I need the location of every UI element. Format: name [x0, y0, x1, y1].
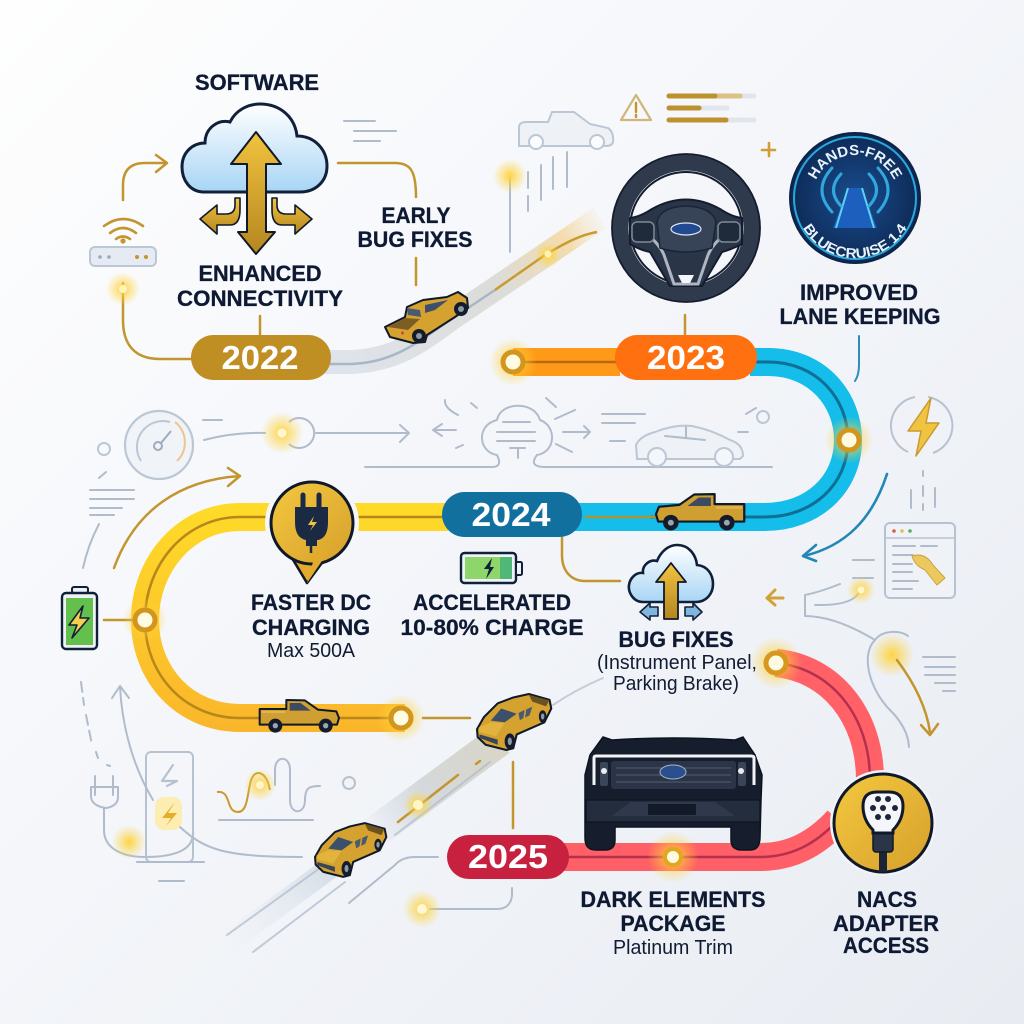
dashed connectors: [911, 471, 935, 510]
text: faster DC charging: FASTER DC: [251, 590, 371, 615]
glow marker with ring: [261, 412, 314, 454]
text: NACS adapter access: [833, 887, 939, 958]
track: 2023 orange: [513, 348, 620, 376]
icon: cloud outline: [365, 406, 772, 467]
text: faster DC charging: Max 500A: [267, 640, 356, 662]
track: 2025 red: [560, 663, 870, 857]
text: improved lane keeping: LANE KEEPING: [780, 304, 940, 329]
road: lower diagonal link: [225, 678, 603, 952]
badge: BlueCruise: [789, 132, 921, 264]
icon: speedometer: [125, 411, 193, 479]
track: 2024 yellow curve: [145, 517, 448, 718]
faint outline illustrations: middle band: [83, 398, 772, 568]
text: dark elements package: Platinum Trim: [613, 937, 733, 959]
icon: dark elements truck front: [585, 737, 762, 850]
pill: 2024: 2024: [472, 496, 551, 533]
truck: diagonal lower: [315, 823, 386, 877]
text: accelerated charge: 10-80% CHARGE: [400, 615, 584, 640]
icon: warning triangle: [621, 95, 651, 120]
arrow: gray upward: [112, 686, 153, 800]
text: accelerated charge: ACCELERATED: [413, 590, 571, 615]
track: 2023-2024 blue curve: [575, 362, 848, 517]
status bars: [669, 96, 754, 120]
text: dark elements package: PACKAGE: [620, 911, 726, 936]
pill: 2022: [191, 335, 331, 380]
truck: yellow track: [260, 700, 339, 733]
gold connectors: [104, 155, 859, 828]
text: enhanced connectivity: CONNECTIVITY: [177, 286, 343, 311]
text: early bug fixes: BUG FIXES: [358, 227, 472, 252]
text: NACS adapter access: ACCESS: [843, 933, 929, 958]
icon: browser window: [885, 523, 955, 598]
icon: NACS adapter: [830, 770, 936, 876]
badge text top: HANDS-FREE: [808, 144, 902, 180]
plus sign: [762, 143, 775, 156]
faint outline illustrations: lower left: [81, 682, 512, 928]
icon: bug fixes cloud: [629, 545, 713, 620]
dashed arc: [81, 682, 110, 766]
text: dark elements package: [580, 887, 766, 959]
icon: pickup wheels: [529, 135, 604, 149]
text: accelerated charge: [400, 590, 584, 640]
road junction lines: [805, 560, 909, 747]
text: bug fixes detail: (Instrument Panel,: [597, 652, 757, 674]
road: 2022 to 2023 link: [320, 218, 600, 364]
pill: 2025: [447, 835, 569, 879]
heading: software: SOFTWARE: [195, 70, 319, 95]
text: enhanced connectivity: ENHANCED: [198, 261, 322, 286]
arrow: small gold left: [767, 590, 783, 605]
arrow: blue curve: [803, 474, 887, 561]
text: dark elements package: DARK ELEMENTS: [580, 887, 766, 912]
note lines: [344, 121, 396, 141]
text: improved lane keeping: IMPROVED: [800, 280, 918, 305]
text: enhanced connectivity: [177, 261, 343, 311]
icon: charger outline: [146, 752, 193, 862]
icon: plug outline: [91, 776, 193, 857]
icon: pickup outline: [519, 112, 613, 146]
faint outline illustrations: right side: [767, 397, 955, 747]
truck: upper road: [385, 292, 468, 343]
icon: battery: [62, 587, 97, 649]
connector lines and arrow: [203, 420, 456, 442]
pill: 2022: 2022: [222, 339, 298, 376]
pill: 2024: [442, 492, 582, 537]
icon: sedan outline: [636, 426, 743, 466]
icon: wifi and router: [90, 219, 156, 306]
pill: 2025: 2025: [468, 838, 548, 875]
text: faster DC charging: [251, 590, 371, 662]
text: bug fixes detail: [597, 627, 757, 695]
icon: software cloud with arrows: [182, 104, 327, 254]
rain speed lines: [510, 152, 567, 252]
icon: lightning in circle: [891, 397, 952, 456]
faint outline illustrations: upper right: [344, 95, 775, 252]
motion dashes: [445, 398, 756, 452]
text: bug fixes detail: BUG FIXES: [618, 627, 734, 652]
badge text bottom: BLUECRUISE 1.4: [803, 223, 906, 258]
text: early bug fixes: [358, 203, 472, 252]
timeline nodes: [123, 338, 873, 883]
pill: 2023: [615, 335, 757, 380]
text: early bug fixes: EARLY: [382, 203, 450, 228]
pill: 2023: 2023: [647, 339, 725, 376]
glow marker with gold arrow: [870, 633, 938, 735]
marker lines: [349, 857, 512, 909]
truck: blue track: [656, 494, 744, 530]
wave chart: [217, 759, 320, 820]
base lines: [137, 827, 302, 881]
text: bug fixes detail: Parking Brake): [613, 673, 739, 695]
icon: charging battery small: [461, 553, 522, 583]
truck: diagonal upper: [477, 694, 551, 750]
glow marker: [493, 159, 527, 193]
icon: steering wheel: [612, 154, 760, 302]
text: faster DC charging: CHARGING: [252, 615, 370, 640]
text: NACS adapter access: ADAPTER: [833, 911, 939, 936]
text: NACS adapter access: NACS: [857, 887, 917, 912]
icon: plug badge: [265, 476, 359, 583]
text: improved lane keeping: [780, 280, 940, 329]
